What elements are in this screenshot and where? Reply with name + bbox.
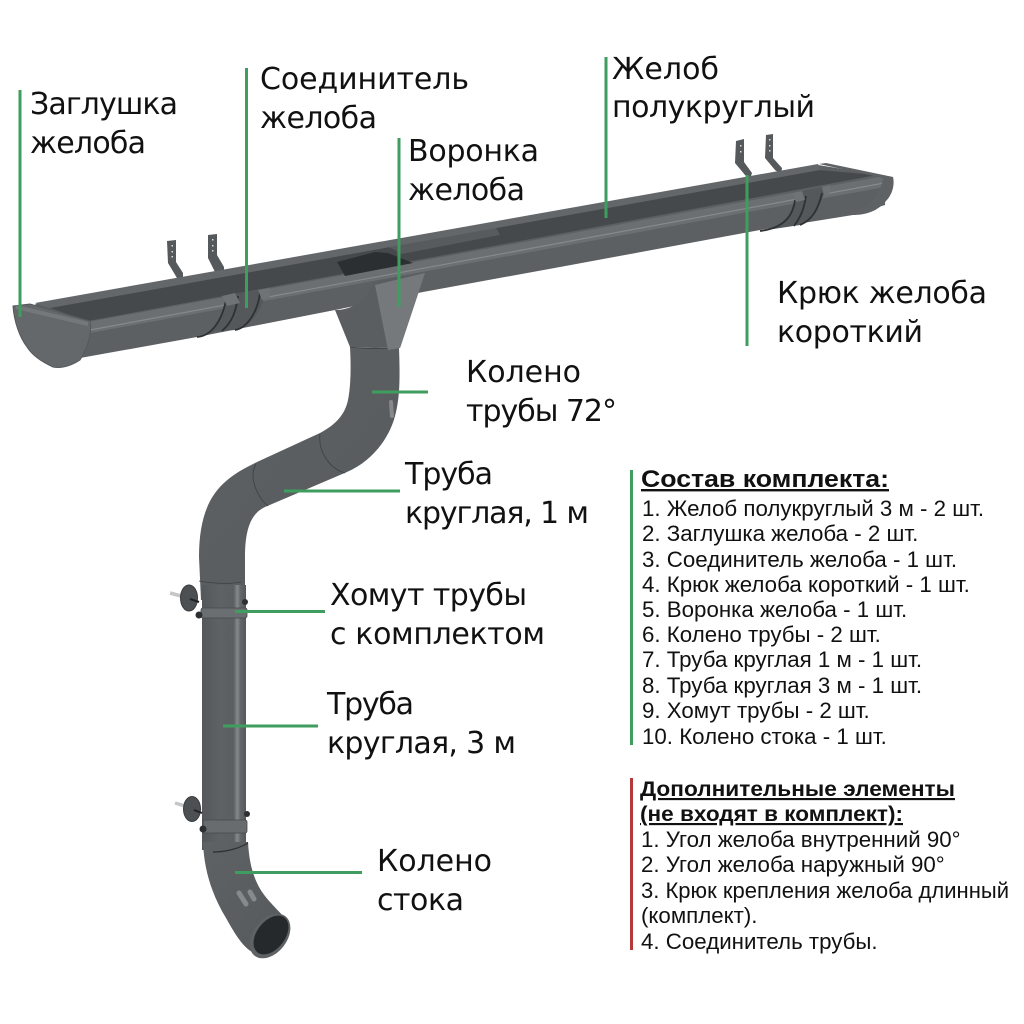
label: drain elbow: стока <box>377 883 464 918</box>
label: drain elbow: Колено <box>377 844 492 879</box>
line: pipe 3 m <box>223 724 318 728</box>
label: connector: Соединитель <box>260 62 469 97</box>
label: drain elbow <box>377 844 492 918</box>
kit list: 8. Труба круглая 3 м - 1 шт. <box>642 673 922 698</box>
label: gutter <box>612 52 815 125</box>
label: short hook: Крюк желоба <box>777 276 987 311</box>
label: clamp <box>330 578 545 652</box>
back rim <box>35 164 820 308</box>
elbow and offset pipe <box>199 347 400 600</box>
leader lines <box>20 57 747 872</box>
label: clamp: с комплектом <box>330 617 545 652</box>
additional list <box>641 827 1009 954</box>
label: pipe 1 m: круглая, 1 м <box>405 496 589 531</box>
line: pipe 1 m <box>284 490 400 492</box>
left end cap lip <box>16 307 88 324</box>
line: short hook <box>746 175 748 346</box>
label: elbow 72: Колено <box>466 355 581 390</box>
drain mouth <box>241 906 299 966</box>
elbow highlight <box>391 402 392 416</box>
kit list: 2. Заглушка желоба - 2 шт. <box>642 521 918 546</box>
label: pipe 1 m <box>404 457 589 531</box>
additional list: 4. Соединитель трубы. <box>641 929 878 954</box>
label: connector <box>260 62 469 136</box>
line: funnel <box>398 138 400 307</box>
kit list: 7. Труба круглая 1 м - 1 шт. <box>642 647 922 672</box>
funnel body <box>335 273 425 348</box>
front rim <box>88 176 885 333</box>
label: funnel <box>408 134 539 208</box>
funnel opening <box>337 252 413 276</box>
kit list: 10. Колено стока - 1 шт. <box>642 724 887 749</box>
label: clamp: Хомут трубы <box>330 578 527 613</box>
line: connector <box>245 68 248 308</box>
hook holes <box>172 139 770 258</box>
additional list: (комплект). <box>641 903 757 928</box>
kit list: 5. Воронка желоба - 1 шт. <box>642 597 907 622</box>
gutter body <box>35 165 886 358</box>
trough cover patch <box>385 226 500 254</box>
line: drain elbow <box>235 871 362 874</box>
label: short hook <box>777 276 987 350</box>
label: funnel: Воронка <box>408 134 539 169</box>
hook 4 <box>765 134 782 174</box>
elbow highlights <box>239 892 254 904</box>
label: gutter: Желоб <box>612 52 719 87</box>
funnel facet <box>375 273 425 350</box>
additional list: 1. Угол желоба внутренний 90° <box>641 827 961 852</box>
line: end cap <box>18 90 22 317</box>
hook 3 <box>735 139 752 179</box>
line: clamp <box>235 610 325 613</box>
label: end cap: желоба <box>30 126 146 161</box>
label: pipe 3 m: круглая, 3 м <box>327 726 516 761</box>
label: elbow 72: трубы 72° <box>466 394 617 429</box>
kit heading: Состав комплекта: <box>641 466 889 493</box>
line: elbow 72 <box>372 390 428 394</box>
label: end cap <box>30 87 178 161</box>
label: pipe 3 m <box>326 687 516 761</box>
kit list: 4. Крюк желоба короткий - 1 шт. <box>642 572 970 597</box>
gutter hooks <box>167 134 782 279</box>
label: end cap: Заглушка <box>30 87 178 122</box>
panel: additional elements <box>630 777 1009 954</box>
kit list: 1. Желоб полукруглый 3 м - 2 шт. <box>642 496 984 521</box>
pipe clamp upper <box>170 585 248 618</box>
right gutter connector <box>760 185 830 231</box>
additional heading: Дополнительные элементы <box>640 777 955 801</box>
label: elbow 72 <box>466 355 617 429</box>
left end cap <box>13 304 91 367</box>
panel: kit contents <box>630 466 990 749</box>
additional list: 3. Крюк крепления желоба длинный <box>641 878 1009 903</box>
additional heading <box>640 777 955 826</box>
line: gutter <box>604 57 608 218</box>
label: pipe 3 m: Труба <box>326 687 414 722</box>
rim highlight <box>90 183 884 330</box>
label: pipe 1 m: Труба <box>404 457 493 492</box>
label: funnel: желоба <box>408 173 525 208</box>
label: connector: желоба <box>260 101 377 136</box>
additional heading: (не входят в комплект): <box>640 802 903 826</box>
gutter semicircular <box>13 163 894 367</box>
drain elbow <box>203 842 287 952</box>
kit list: 6. Колено трубы - 2 шт. <box>642 622 881 647</box>
elbow joints <box>199 347 399 583</box>
round pipe 3 m <box>202 585 246 850</box>
trough <box>50 170 877 321</box>
green rule <box>630 470 633 745</box>
downpipe assembly <box>170 347 400 966</box>
kit list: 3. Соединитель желоба - 1 шт. <box>642 547 957 572</box>
label: gutter: полукруглый <box>612 90 815 125</box>
left gutter connector <box>197 288 270 337</box>
pipe clamp lower <box>175 796 250 852</box>
red rule <box>630 778 633 950</box>
hook 1 <box>167 240 183 279</box>
hook 2 <box>208 234 224 272</box>
kit list: 9. Хомут трубы - 2 шт. <box>642 698 870 723</box>
additional list: 2. Угол желоба наружный 90° <box>641 852 945 877</box>
label: short hook: короткий <box>777 315 923 350</box>
right end cap <box>819 163 894 215</box>
